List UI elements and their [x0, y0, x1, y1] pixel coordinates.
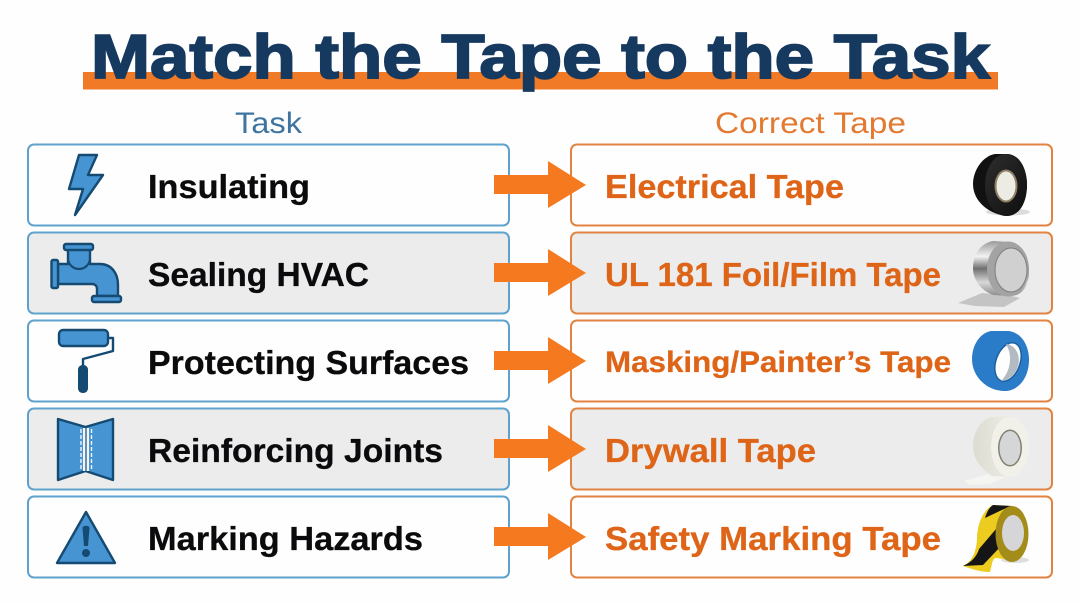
icon: paint roller: [59, 330, 113, 393]
task label: Insulating: Insulating: [148, 168, 310, 205]
icon: white drywall tape roll: [964, 416, 1029, 485]
icon: blue painter's tape roll: [972, 331, 1029, 391]
panel: task Protecting Surfaces: [28, 320, 509, 402]
tape name: Safety Marking Tape: Safety Marking Tape: [605, 520, 941, 557]
icon: drywall joint: [58, 419, 113, 480]
icon: hazard stripe tape roll: [963, 505, 1029, 572]
arrow: [494, 513, 586, 560]
icon: foil tape roll: [958, 241, 1029, 307]
task label: Marking Hazards: Marking Hazards: [148, 520, 423, 557]
icon: pipe faucet: [52, 244, 121, 302]
title underline: [83, 72, 998, 90]
panel: tape Safety Marking: [571, 496, 1052, 578]
tape name: Electrical Tape: Electrical Tape: [605, 168, 844, 205]
arrow: [494, 161, 586, 208]
row: Marking Hazards: [28, 496, 1052, 578]
panel: task Marking Hazards: [28, 496, 509, 578]
row: Insulating: [28, 144, 1052, 226]
icon: black electrical tape roll: [973, 154, 1030, 216]
row: Sealing HVAC: [28, 232, 1052, 314]
column heading: Correct Tape: Correct Tape: [715, 107, 906, 140]
arrow: [494, 337, 586, 384]
tape name: Drywall Tape: Drywall Tape: [605, 432, 816, 469]
panel: tape Electrical Tape: [571, 144, 1052, 226]
panel: task Insulating: [28, 144, 509, 226]
panel: task Sealing HVAC: [28, 232, 509, 314]
task label: Sealing HVAC: Sealing HVAC: [148, 256, 369, 293]
arrow: [494, 249, 586, 296]
icon: lightning bolt: [69, 155, 103, 215]
row: Reinforcing Joints: [28, 408, 1052, 490]
panel: tape Drywall: [571, 408, 1052, 490]
panel: task Reinforcing Joints: [28, 408, 509, 490]
panel: tape UL 181: [571, 232, 1052, 314]
row: Protecting Surfaces: [28, 320, 1052, 402]
panel: tape Masking: [571, 320, 1052, 402]
column heading: Task: Task: [235, 107, 303, 140]
tape name: Masking/Painter's Tape: Masking/Painter’s Tape: [605, 346, 951, 379]
icon: warning triangle: [57, 512, 115, 563]
title: Match the Tape to the Task: [91, 23, 991, 92]
arrow: [494, 425, 586, 472]
tape name: UL 181 Foil/Film Tape: UL 181 Foil/Film Tape: [605, 256, 941, 293]
task label: Protecting Surfaces: Protecting Surfaces: [148, 344, 469, 381]
task label: Reinforcing Joints: Reinforcing Joints: [148, 432, 443, 469]
